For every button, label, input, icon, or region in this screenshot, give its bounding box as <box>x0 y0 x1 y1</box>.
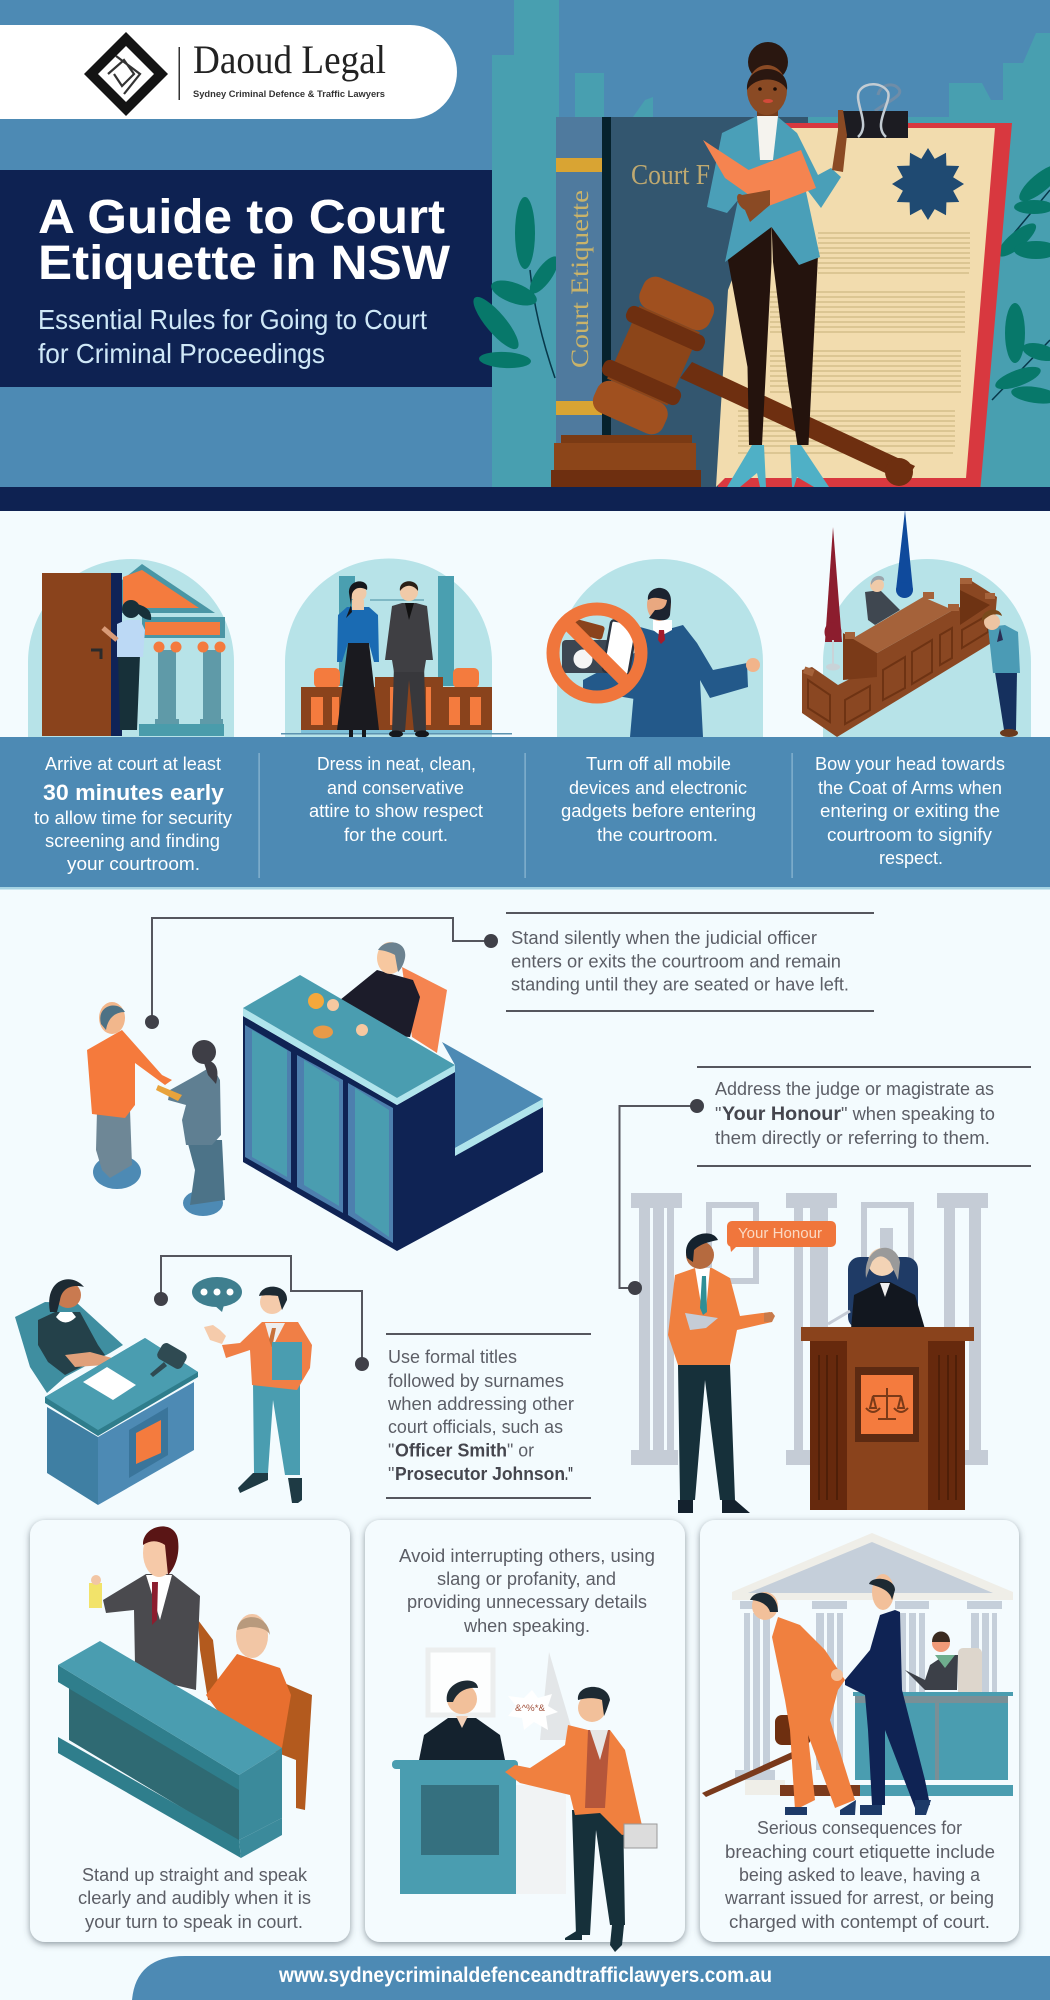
logo pill <box>0 25 457 119</box>
illustration: bowing to the bench <box>802 510 1020 737</box>
illustration: judge at podium <box>801 1248 974 1510</box>
text callout: court officials, such as <box>388 1417 563 1437</box>
gavel <box>702 1715 860 1797</box>
connector <box>154 1256 369 1371</box>
text: arrive early <box>34 754 232 874</box>
icon: seal <box>892 148 964 220</box>
text: bow: entering or exiting the <box>820 801 1000 821</box>
text callout: " or <box>507 1440 534 1460</box>
subtitle: Essential Rules for Going to Court <box>38 304 427 335</box>
text: being asked to leave, having a <box>739 1865 981 1885</box>
illustration: courtroom columns <box>631 1193 988 1465</box>
connector <box>620 1099 704 1295</box>
text: attire: Dress in neat, clean, <box>317 754 476 774</box>
text callout: Your Honour <box>722 1104 842 1125</box>
text: Serious consequences for <box>757 1818 962 1838</box>
panel: stand up straight card <box>30 1520 350 1942</box>
text callout <box>697 1066 1031 1167</box>
text callout: " <box>388 1464 394 1484</box>
text callout: " when speaking to <box>841 1104 995 1124</box>
panel: four quick rules <box>0 510 1050 890</box>
bench <box>802 578 997 737</box>
text: devices: gadgets before entering <box>561 801 756 821</box>
document with seal <box>716 84 1012 487</box>
icon: scales of justice <box>866 1388 908 1419</box>
logo pill: Sydney Criminal Defence & Traffic Lawyers <box>193 89 385 100</box>
illustration: judge and speaking man <box>392 1650 657 1952</box>
panel: stand silently <box>87 912 874 1251</box>
text: bow: Bow your head towards <box>815 754 1005 774</box>
text callout: followed by surnames <box>388 1371 564 1391</box>
icon: diamond logo <box>84 32 168 116</box>
officer <box>845 1610 930 1808</box>
text callout: " <box>715 1104 721 1124</box>
illustration: no phones <box>553 588 760 737</box>
lower bench <box>397 1072 543 1251</box>
blazer <box>707 117 841 265</box>
man <box>572 1810 625 1935</box>
text: slang or profanity, and <box>437 1569 616 1589</box>
text <box>78 1865 311 1932</box>
illustration: lawyer <box>668 1233 775 1513</box>
panel: avoid interrupting card <box>365 1520 685 1952</box>
footer: www.sydneycriminaldefenceandtrafficlawyers.com.au <box>278 1964 772 1987</box>
text: arrive early: to allow time for security <box>34 808 232 828</box>
text: bow: courtroom to signify <box>827 825 992 845</box>
illustration: judge at isometric bench <box>243 942 543 1251</box>
illustration: clerk at desk <box>15 1279 198 1505</box>
arches <box>28 559 1031 737</box>
text: attire: and conservative <box>327 778 464 798</box>
text callout: Use formal titles <box>388 1347 517 1367</box>
panel: address the judge <box>620 1066 1031 1513</box>
text: bow <box>815 754 1005 868</box>
table <box>69 1675 239 1842</box>
text: breaching court etiquette include <box>725 1842 995 1862</box>
woman <box>337 643 379 730</box>
icon: gavel <box>150 1341 189 1377</box>
title: A Guide to Court <box>38 191 445 244</box>
open book <box>703 140 816 207</box>
judge <box>402 967 447 1053</box>
text: Avoid interrupting others, using <box>399 1546 655 1566</box>
illustration: two people shaking hands <box>87 1002 225 1216</box>
text callout: enters or exits the courtroom and remain <box>511 952 841 972</box>
title banner <box>0 170 492 387</box>
text: providing unnecessary details <box>407 1592 647 1612</box>
text callout: ." <box>565 1464 573 1484</box>
text: when speaking. <box>463 1616 590 1636</box>
text callout: Address the judge or magistrate as <box>715 1079 994 1099</box>
text: bow: respect. <box>879 848 943 868</box>
text callout: when addressing other <box>387 1394 574 1414</box>
text <box>724 1818 995 1932</box>
text: charged with contempt of court. <box>729 1912 990 1932</box>
icon: prohibition sign <box>553 609 641 697</box>
bowing man <box>995 672 1017 730</box>
arm raised <box>832 110 847 172</box>
text: attire: for the court. <box>344 825 448 845</box>
text: devices: devices and electronic <box>569 778 747 798</box>
camera <box>562 618 637 676</box>
judge <box>865 590 900 625</box>
text: warrant issued for arrest, or being <box>724 1888 994 1908</box>
text: clearly and audibly when it is <box>78 1888 311 1908</box>
text: devices: the courtroom. <box>597 825 718 845</box>
icon: binder clip <box>842 84 908 138</box>
text: attire <box>309 754 483 845</box>
illustration: door and temple <box>42 564 226 736</box>
text callout <box>506 912 874 1012</box>
title banner: for Criminal Proceedings <box>38 338 325 369</box>
text: attire: attire to show respect <box>309 801 483 821</box>
text callout: standing until they are seated or have left. <box>511 974 849 994</box>
text callout: Prosecutor Johnson <box>395 1464 565 1484</box>
illustration: dressed couple <box>281 576 512 738</box>
gavel <box>551 271 915 487</box>
text: Stand up straight and speak <box>82 1865 308 1885</box>
text callout: " <box>388 1440 394 1460</box>
illustration: speaking man with folder <box>204 1287 312 1503</box>
text callout: them directly or referring to them. <box>715 1128 990 1148</box>
text: devices <box>561 754 756 845</box>
panel: hero header <box>0 0 1050 487</box>
illustration: arrest at court <box>702 1533 1013 1815</box>
illustration: men at bar table <box>58 1526 312 1858</box>
leaves right <box>992 159 1050 406</box>
prisoner <box>772 1617 855 1810</box>
icon: profanity burst: &^%*& <box>515 1703 545 1713</box>
connector <box>145 918 498 1029</box>
text: your turn to speak in court. <box>85 1912 303 1932</box>
text: devices: Turn off all mobile <box>586 754 731 774</box>
logo pill: Daoud Legal <box>193 37 386 82</box>
woman with book <box>703 42 847 487</box>
leaves left <box>467 197 563 378</box>
decorative navy strip <box>0 487 1050 511</box>
text: arrive early: Arrive at court at least <box>45 754 221 774</box>
footer <box>132 1956 1050 2000</box>
book: court etiquette <box>556 117 808 487</box>
book: court etiquette: Court F <box>631 160 710 191</box>
trousers <box>727 222 818 445</box>
text callout <box>386 1333 591 1499</box>
panel: formal titles <box>15 1256 591 1505</box>
speech bubble: your honour <box>727 1221 836 1252</box>
panel: consequences card <box>700 1520 1019 1942</box>
speech bubble: your honour: Your Honour <box>738 1225 822 1242</box>
panel: rules band <box>0 737 1050 890</box>
text: arrive early: screening and finding <box>45 831 220 851</box>
icon: profanity burst <box>508 1690 558 1730</box>
text: bow: the Coat of Arms when <box>818 778 1002 798</box>
text callout: Stand silently when the judicial officer <box>511 928 817 948</box>
text <box>399 1546 655 1636</box>
title banner: Etiquette in NSW <box>38 237 451 290</box>
text: arrive early: your courtroom. <box>67 854 200 874</box>
book: court etiquette: Court Etiquette <box>567 190 594 368</box>
man <box>392 665 426 732</box>
icon: speech bubble <box>192 1277 242 1312</box>
text callout: Officer Smith <box>395 1440 507 1460</box>
text: arrive early: 30 minutes early <box>43 780 225 805</box>
head <box>748 42 788 82</box>
